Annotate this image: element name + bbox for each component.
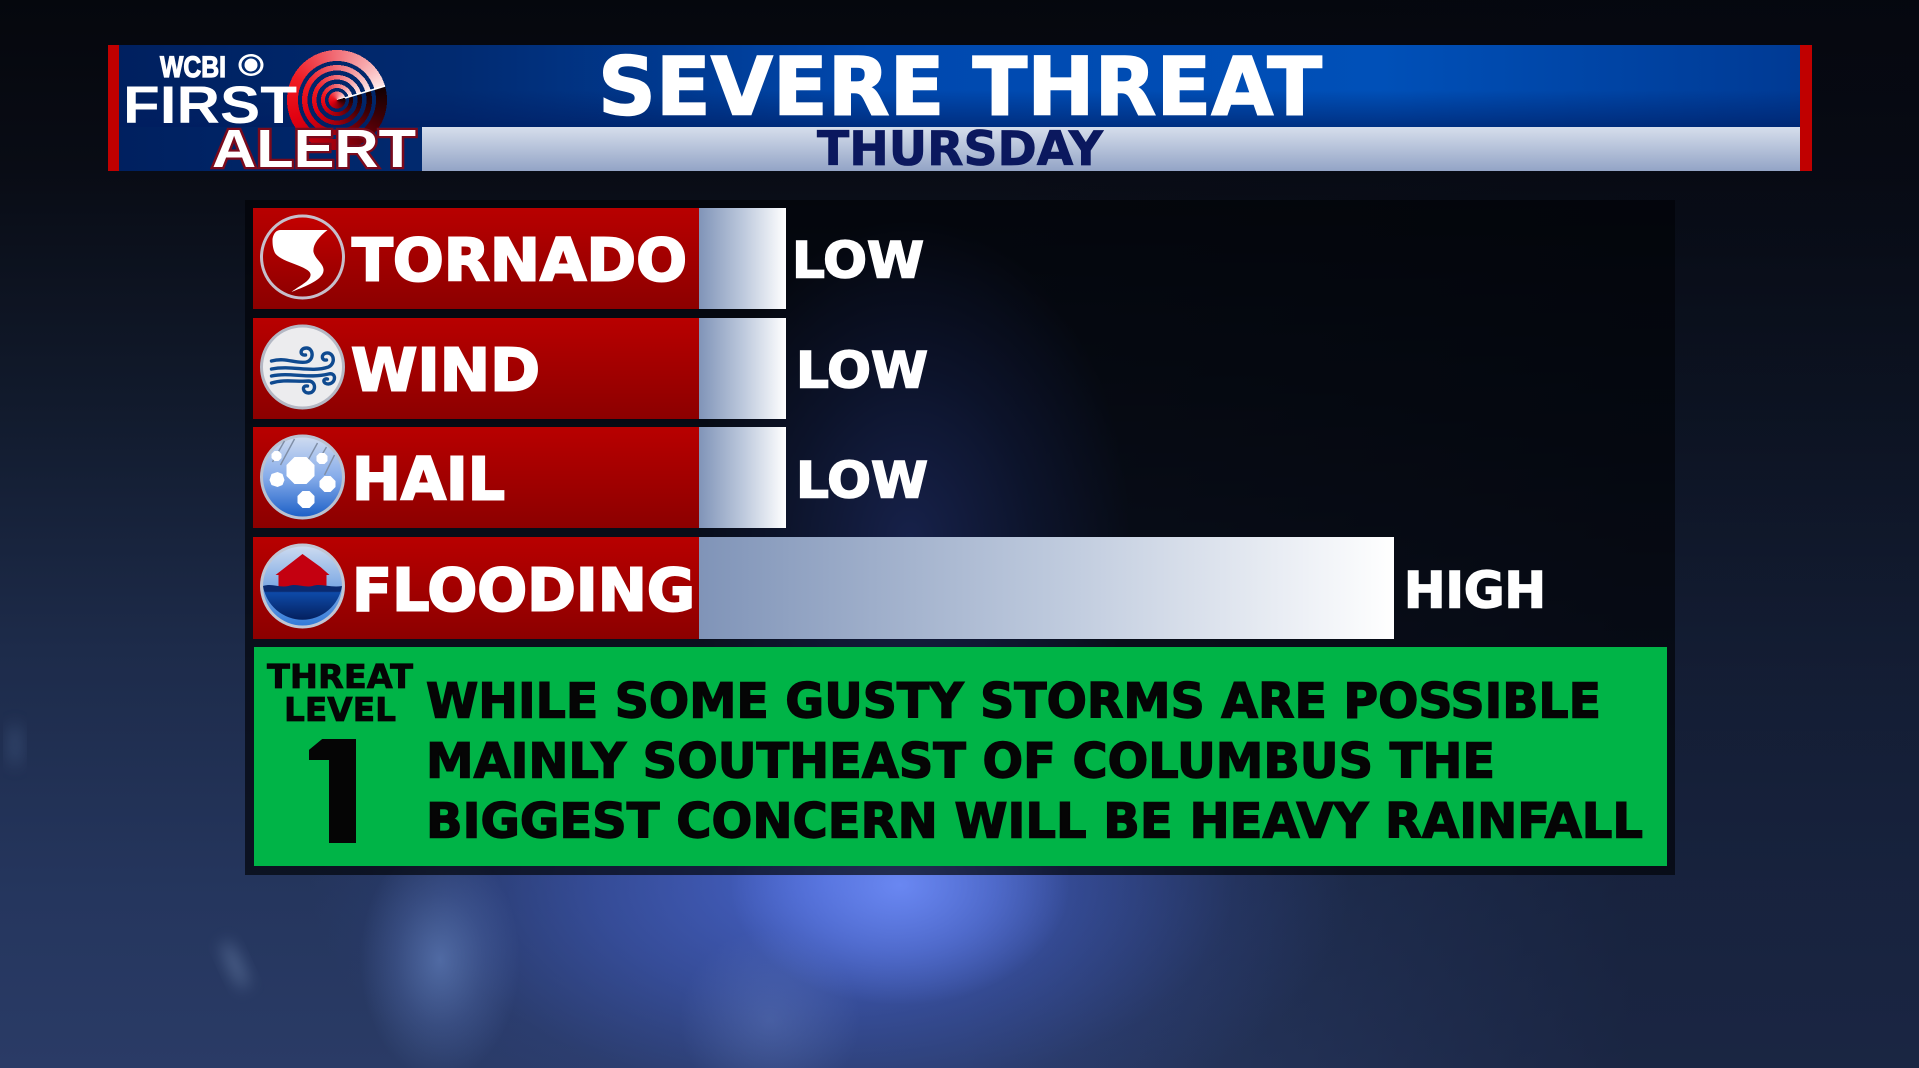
icon: radar rings	[285, 48, 389, 152]
hail label background	[253, 427, 699, 528]
icon: flooded house	[262, 545, 344, 627]
wind level bar	[699, 318, 786, 419]
cloud streaks	[11, 723, 251, 991]
right red edge	[1800, 45, 1812, 171]
panel: threat chart backing	[245, 200, 1675, 875]
icon: wind	[262, 326, 344, 408]
flooding level text: HIGH	[1404, 562, 1546, 620]
row: flooding	[253, 537, 1546, 639]
row: tornado	[253, 208, 924, 309]
subheading: day: THURSDAY	[817, 122, 1104, 177]
left red edge	[108, 45, 119, 171]
wind level text: LOW	[796, 342, 928, 400]
row: hail	[253, 427, 928, 528]
flooding label: FLOODING	[352, 556, 695, 624]
logo station name: WCBI	[160, 51, 226, 84]
tornado level bar	[699, 208, 786, 309]
forecast message	[426, 674, 1643, 850]
threat label: THREAT	[267, 657, 413, 696]
wind label: WIND	[351, 336, 540, 404]
threat level number: 1	[309, 711, 373, 874]
radar sweep line	[345, 86, 385, 98]
logo word: alert: ALERT	[212, 119, 416, 179]
row: wind	[253, 318, 928, 419]
forecast message: BIGGEST CONCERN WILL BE HEAVY RAINFALL	[426, 794, 1643, 850]
header banner	[108, 40, 1812, 177]
logo word: first: FIRST	[123, 76, 297, 135]
green background	[254, 647, 1667, 866]
panel: threat level callout	[254, 647, 1667, 874]
hail label: HAIL	[352, 444, 505, 514]
flooding level bar	[699, 537, 1394, 639]
icon: tornado	[262, 216, 344, 298]
banner silver strip	[422, 127, 1801, 171]
wind label background	[253, 318, 699, 419]
flooding label background	[253, 537, 699, 639]
forecast message: WHILE SOME GUSTY STORMS ARE POSSIBLE	[426, 674, 1601, 730]
hail level bar	[699, 427, 786, 528]
icon: hail	[262, 436, 344, 518]
forecast message: MAINLY SOUTHEAST OF COLUMBUS THE	[426, 734, 1495, 790]
heading: severe threat: SEVERE THREAT	[598, 40, 1322, 134]
hail level text: LOW	[796, 452, 928, 510]
level label: LEVEL	[284, 690, 396, 729]
tornado label background	[253, 208, 699, 309]
tornado label: TORNADO	[352, 226, 687, 294]
icon: eye mark	[238, 54, 264, 76]
logo: WCBI First Alert	[123, 48, 416, 179]
tornado level text: LOW	[792, 232, 924, 290]
banner blue background	[115, 45, 1802, 171]
